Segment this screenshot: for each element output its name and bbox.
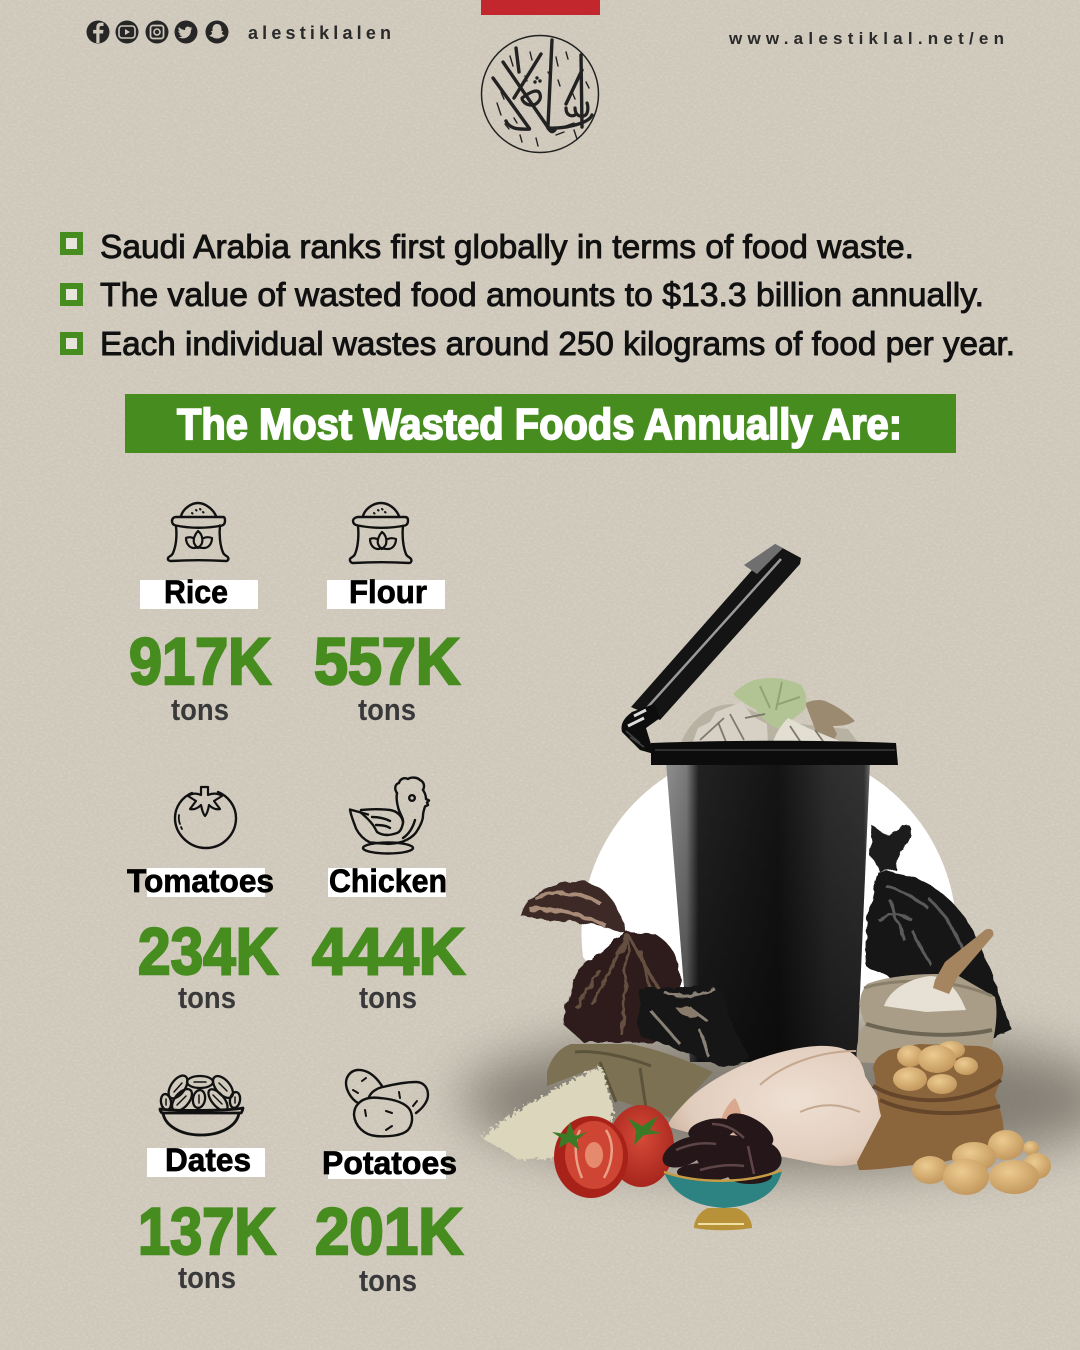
- icon: snapchat: [206, 20, 228, 44]
- unit: tons: [178, 980, 236, 1015]
- value: 917K: [129, 624, 271, 698]
- social icons: [86, 20, 228, 44]
- bowl of dates: [658, 1107, 786, 1230]
- item: rice: [129, 503, 271, 727]
- potato sack: [857, 1041, 1004, 1170]
- value: 137K: [138, 1194, 276, 1268]
- item: flour: [314, 503, 460, 727]
- white circle backdrop: [582, 746, 955, 1030]
- icon: instagram: [146, 20, 168, 44]
- icon: youtube: [116, 20, 138, 44]
- rice sack: [547, 1044, 713, 1118]
- icon: tomato: [175, 787, 236, 848]
- bullet 3: Each individual wastes around 250 kilograms of food per year.: [100, 325, 1015, 362]
- ground shadow: [460, 1028, 1080, 1172]
- label: Dates: [165, 1142, 251, 1178]
- item: chicken: [312, 778, 465, 1015]
- icon: potatoes: [346, 1070, 428, 1136]
- rice pile: [482, 1067, 614, 1159]
- small black bag: [639, 985, 751, 1068]
- bullet 2: The value of wasted food amounts to $13.3 billion annually.: [100, 276, 984, 313]
- red top tab: [481, 0, 600, 15]
- loose potatoes: [912, 1130, 1051, 1195]
- unit: tons: [359, 1263, 417, 1298]
- chicken: [667, 1046, 882, 1166]
- unit: tons: [178, 1260, 236, 1295]
- flour sack: [856, 929, 996, 1071]
- label: [140, 574, 258, 610]
- icon: twitter: [174, 20, 198, 44]
- website url: www.alestiklal.net/en: [728, 29, 1004, 48]
- value: 201K: [315, 1194, 463, 1268]
- tomatoes: [552, 1105, 674, 1198]
- item: potatoes: [315, 1070, 463, 1298]
- value: 444K: [312, 914, 465, 988]
- label: Potatoes: [322, 1145, 457, 1181]
- icon: facebook: [86, 20, 110, 44]
- icon: flour sack: [350, 503, 411, 563]
- handle text: alestiklalen: [248, 23, 391, 43]
- icon: chicken: [350, 778, 429, 854]
- label: Tomatoes: [127, 863, 274, 899]
- trash in bin: [680, 678, 860, 746]
- right garbage bag: [866, 824, 1012, 1038]
- value: 234K: [138, 914, 278, 988]
- bin rim: [651, 741, 898, 765]
- unit: tons: [359, 980, 417, 1015]
- item: tomatoes: [127, 787, 278, 1015]
- label: [327, 574, 445, 610]
- lid: [621, 544, 801, 754]
- label: Flour: [349, 574, 427, 610]
- heading banner: The Most Wasted Foods Annually Are:: [177, 400, 902, 449]
- label: Chicken: [329, 863, 447, 899]
- bullet list: [63, 228, 1015, 362]
- left garbage bag: [521, 881, 682, 1042]
- logo: calligraphic roundel: [482, 36, 598, 152]
- unit: tons: [358, 692, 416, 727]
- icon: bowl of dates: [160, 1072, 243, 1135]
- bin body: [666, 762, 870, 1062]
- unit: tons: [171, 692, 229, 727]
- bullet 1: Saudi Arabia ranks first globally in terms of food waste.: [100, 228, 914, 265]
- illustration: trash bin with wasted food: [460, 544, 1080, 1230]
- label: Rice: [164, 574, 228, 610]
- value: 557K: [314, 624, 460, 698]
- icon: rice sack: [168, 503, 228, 561]
- item: dates: [138, 1072, 276, 1295]
